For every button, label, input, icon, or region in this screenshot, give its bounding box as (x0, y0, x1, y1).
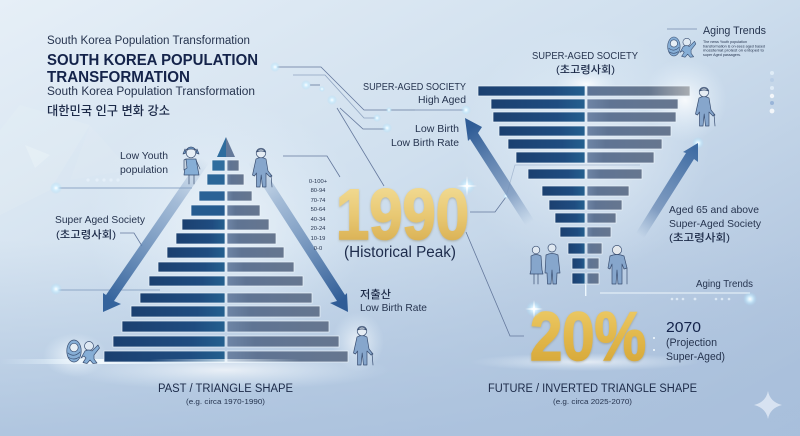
label: 2070 projection (666, 319, 725, 363)
icon: elder top right (696, 87, 715, 126)
aging trends panel (668, 25, 766, 57)
age scale labels: 70-74 (311, 198, 326, 204)
icon: elder beside funnel (608, 245, 627, 284)
aging trends note: The news Youth population (703, 40, 747, 44)
main title line 2: TRANSFORMATION (47, 69, 190, 86)
heading: funnel top (532, 50, 638, 76)
eyebrow: South Korea Population Transformation (47, 35, 250, 47)
big number: 1990: 1990 (336, 176, 469, 255)
connector lines (58, 29, 750, 336)
heading: past: PAST / TRIANGLE SHAPE (158, 383, 293, 395)
labels: low birth (391, 124, 459, 149)
label: super aged society (55, 215, 145, 241)
age scale labels: 0-0 (314, 246, 322, 252)
age scale labels: 20-24 (311, 226, 326, 232)
icon: girl (183, 147, 200, 184)
pyramid base highlight (150, 359, 300, 363)
sparkle (525, 300, 543, 318)
arrow: left pyramid down-right (248, 157, 348, 312)
left pyramid (104, 137, 348, 362)
label: low youth: Low Youth (120, 151, 168, 162)
label: aged 65: Aged 65 and above (669, 204, 759, 216)
age scale labels: 10-19 (311, 236, 325, 242)
icon: elder near apex (252, 148, 272, 187)
labels: low birth: Low Birth (415, 124, 459, 135)
icon: adult couple (530, 244, 560, 284)
label: low birth rate: Low Birth Rate (360, 302, 427, 314)
title block (47, 35, 258, 118)
pyramid apex (217, 137, 226, 157)
age scale labels: 40-34 (311, 217, 326, 223)
heading: future (488, 383, 697, 406)
label: 2070 projection: (Projection (666, 337, 717, 349)
label: aged 65: (초고령사회) (669, 231, 730, 244)
arrow: left pyramid down-left (103, 157, 209, 312)
labels: super-aged high aged (363, 82, 466, 106)
labels: super-aged high aged: High Aged (418, 95, 466, 106)
label: aged 65: Super-Aged Society (669, 218, 762, 230)
bottom light streak (0, 359, 210, 364)
funnel centre light (585, 284, 586, 296)
funnel right bars (587, 86, 690, 284)
aging trends heading: Aging Trends (703, 25, 766, 37)
pyramid left bars: youth (104, 160, 225, 362)
label: aging trends lower: Aging Trends (696, 279, 753, 290)
label: super aged society: (초고령사회) (56, 228, 116, 241)
funnel left bars (478, 86, 585, 284)
inverted pyramid (478, 86, 690, 284)
label: low youth: population (120, 165, 168, 176)
age scale labels: 80-94 (311, 188, 326, 194)
heading: funnel top: SUPER-AGED SOCIETY (532, 50, 638, 62)
arrow: funnel up-left (465, 118, 534, 226)
korean subtitle: 대한민국 인구 변화 강소 (47, 104, 170, 118)
subtitle: South Korea Population Transformation (47, 86, 255, 98)
labels: super-aged high aged: SUPER-AGED SOCIETY (363, 82, 466, 93)
label: aged 65 (669, 204, 762, 244)
label: 2070 projection: 2070 (666, 319, 701, 336)
pyramid right bars: elderly (227, 160, 348, 362)
heading: funnel top: (초고령사회) (556, 63, 615, 76)
age scale labels: 50-64 (311, 207, 326, 213)
glow dots (50, 62, 774, 351)
label: 2070 projection: Super-Aged) (666, 351, 725, 363)
icon: sparkle star (754, 391, 782, 419)
label: low birth rate (360, 288, 427, 314)
heading: future: FUTURE / INVERTED TRIANGLE SHAPE (488, 383, 697, 395)
aging trends note (703, 40, 765, 57)
label: low youth (120, 151, 168, 176)
icon: baby small (668, 37, 696, 57)
sparkle (457, 176, 477, 196)
age scale labels: 0-100+ (309, 179, 328, 185)
icon: elder bottom right (354, 326, 373, 365)
big number: 20%: 20% (530, 298, 646, 375)
aging trends note: transformation is on-sees aged based (703, 44, 765, 48)
label: historical peak: (Historical Peak) (344, 244, 456, 261)
main title: SOUTH KOREA POPULATION (47, 52, 258, 69)
label: super aged society: Super Aged Society (55, 215, 145, 226)
aging trends note: mosstemat protest on entoped to (703, 48, 764, 52)
heading: future: (e.g. circa 2025-2070) (553, 397, 633, 406)
arrow: funnel up-right (636, 143, 698, 238)
heading: past: (e.g. circa 1970-1990) (186, 397, 266, 406)
heading: past (158, 383, 293, 406)
aging trends note: super Aged passagers. (703, 53, 741, 57)
age scale labels (309, 179, 328, 252)
label: low birth rate: 저출산 (360, 288, 391, 301)
labels: low birth: Low Birth Rate (391, 138, 459, 149)
icon: baby and toddler (67, 340, 100, 364)
